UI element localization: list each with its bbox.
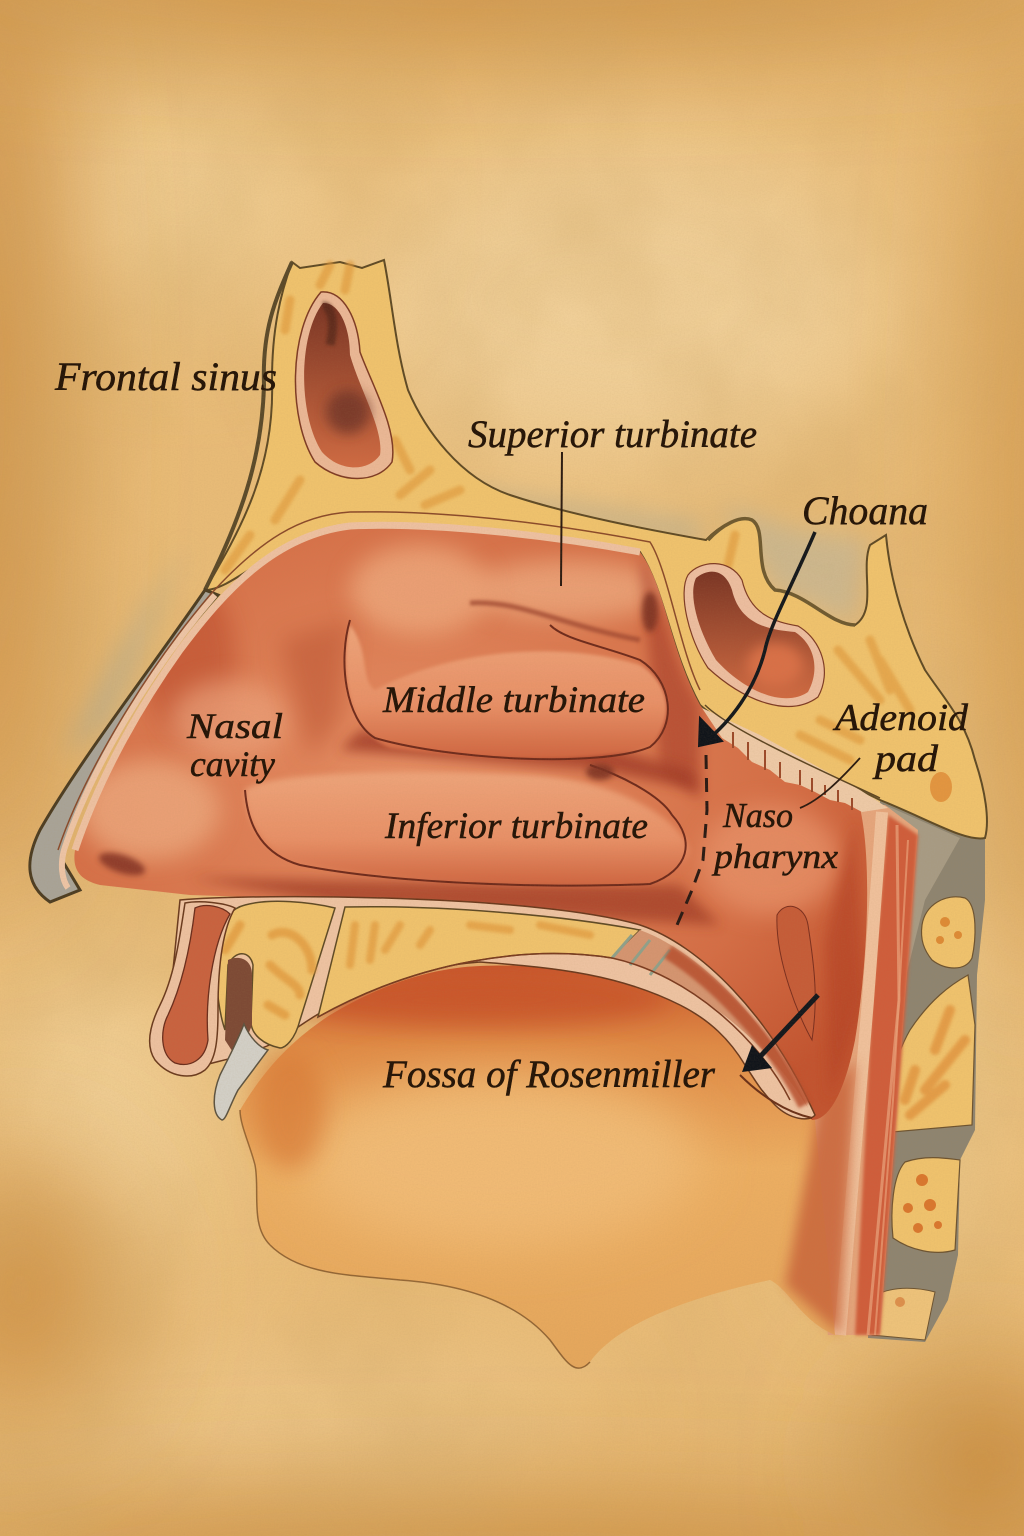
leader line: adenoid pad xyxy=(800,758,860,808)
vertebra 1 xyxy=(921,897,975,968)
label: Middle turbinate: Middle turbinate xyxy=(382,680,645,721)
facial bone and sphenoid xyxy=(205,260,987,838)
label: Adenoid pad: pad xyxy=(872,738,939,780)
tongue and chin xyxy=(240,965,855,1368)
dashed line: choana to palate xyxy=(677,755,707,925)
inferior turbinate xyxy=(245,764,690,886)
label: Adenoid pad: Adenoid xyxy=(832,697,969,739)
label: Choana: Choana xyxy=(802,488,928,533)
spine and neck tissue xyxy=(868,800,985,1342)
vertebra 2 xyxy=(889,975,975,1132)
shadow washes behind anatomy xyxy=(60,490,868,760)
frontal sinus xyxy=(295,292,393,478)
middle turbinate xyxy=(344,592,668,759)
label: Superior turbinate: Superior turbinate xyxy=(468,413,757,456)
vertebra 3 xyxy=(892,1158,960,1252)
label: Nasal cavity: cavity xyxy=(190,744,275,784)
label: Nasopharynx: Naso xyxy=(722,796,793,835)
label: Nasal cavity: Nasal xyxy=(186,706,283,746)
palatine bone xyxy=(318,907,640,1017)
leader line: superior turbinate xyxy=(561,452,562,586)
label: Frontal sinus: Frontal sinus xyxy=(54,354,277,399)
premaxilla bone xyxy=(216,901,335,1048)
posterior pharyngeal wall xyxy=(780,800,918,1335)
arrow: choana xyxy=(699,532,815,746)
sphenoid sinus xyxy=(684,564,824,706)
nose skin and grey cartilage strip xyxy=(30,590,218,902)
label: Fossa of Rosenmiller: Fossa of Rosenmiller xyxy=(382,1053,716,1096)
adenoid fringe xyxy=(702,705,888,812)
tooth xyxy=(214,958,268,1120)
label: Nasopharynx: pharynx xyxy=(711,837,838,876)
hard and soft palate xyxy=(170,897,815,1119)
label: Inferior turbinate: Inferior turbinate xyxy=(384,806,648,847)
arrow: fossa of Rosenmuller xyxy=(742,995,818,1072)
vertebra 4 xyxy=(872,1288,935,1340)
torus and eustachian opening xyxy=(777,906,815,1040)
upper lip xyxy=(150,902,235,1076)
nasal cavity xyxy=(58,512,867,1120)
